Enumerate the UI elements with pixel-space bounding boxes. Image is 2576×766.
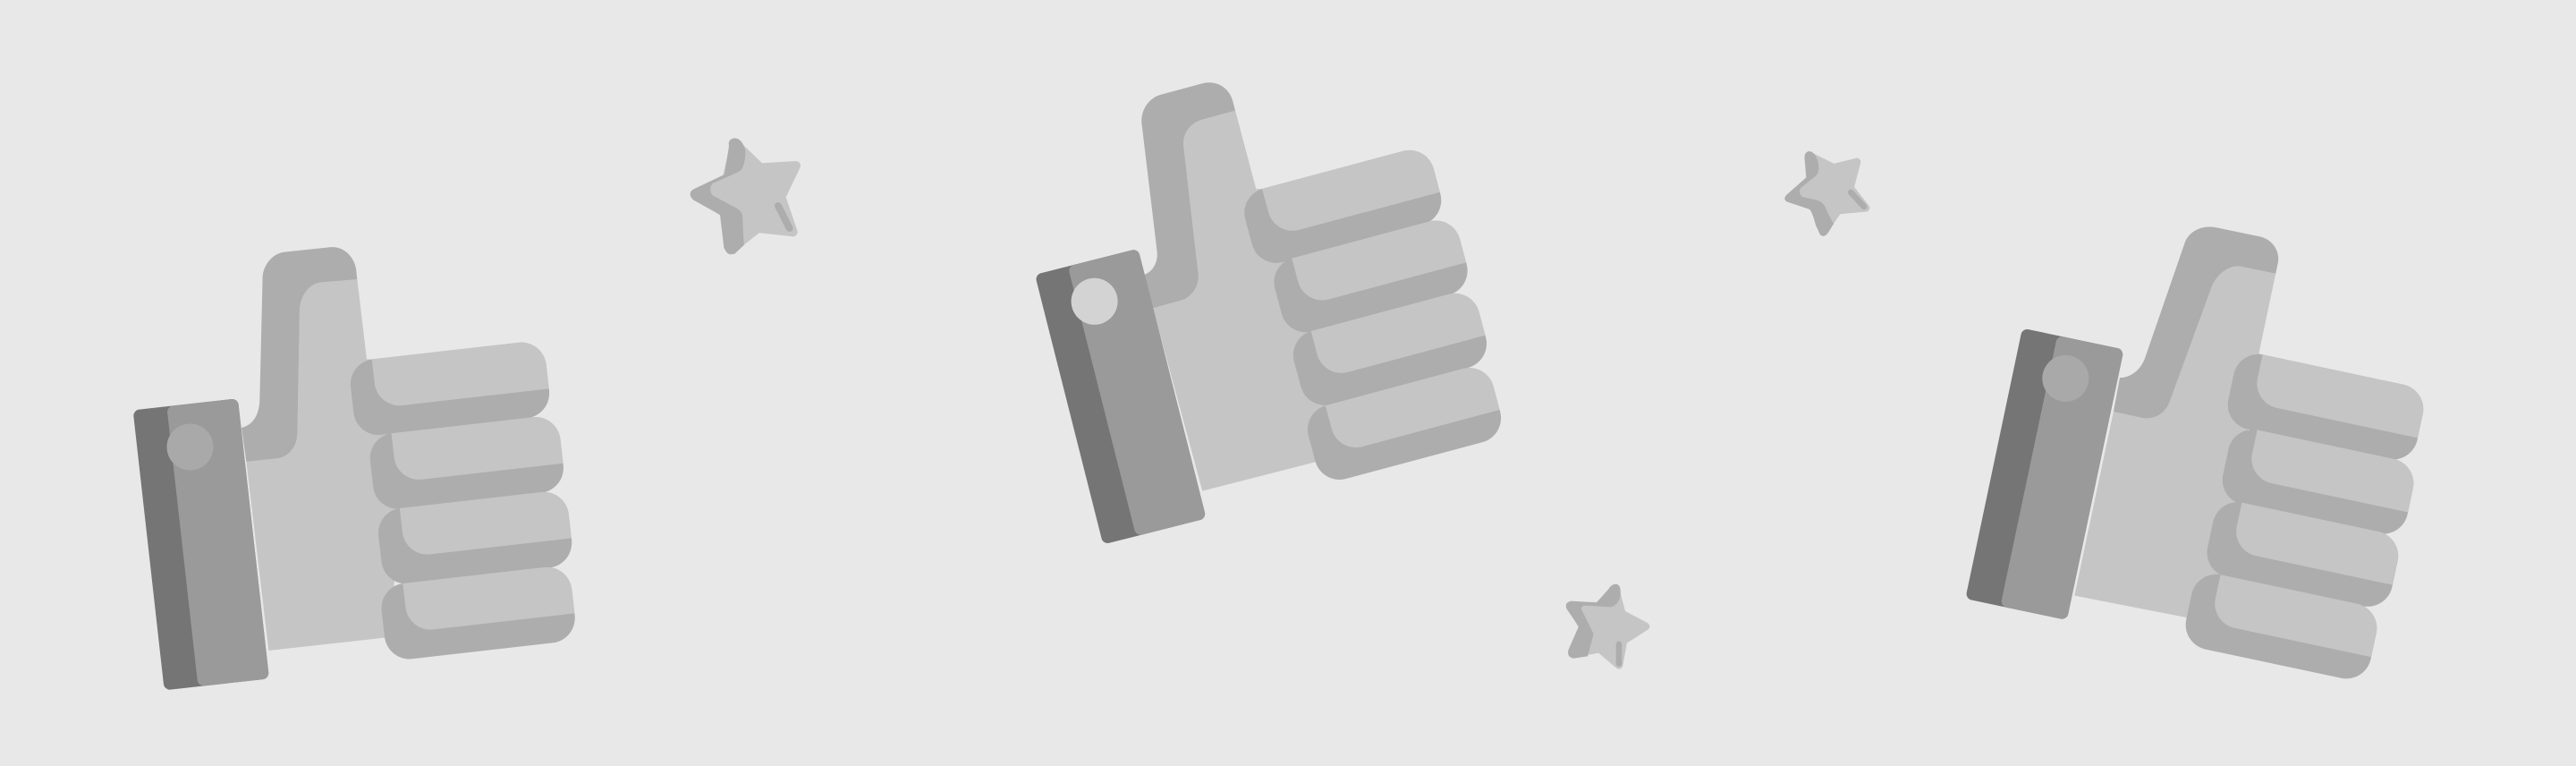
- cuff: [133, 398, 269, 690]
- cuff button: [1072, 278, 1118, 325]
- finger 1: [2224, 350, 2428, 464]
- finger 3: [376, 489, 574, 586]
- finger 2: [2218, 425, 2419, 539]
- finger 1: [348, 340, 552, 438]
- icon: star top left: [691, 138, 796, 254]
- finger 4: [2181, 570, 2381, 684]
- cuff button: [166, 424, 213, 471]
- hand palm and thumb: [2074, 226, 2278, 617]
- finger 3: [2202, 498, 2402, 611]
- cuff button: [2042, 355, 2089, 402]
- finger 3: [1288, 288, 1492, 411]
- icon: left thumbs up: [133, 247, 578, 690]
- finger 2: [1268, 215, 1473, 338]
- hand palm and thumb: [1141, 82, 1330, 491]
- finger 1: [1239, 145, 1447, 268]
- icon: star bottom centre: [1566, 584, 1646, 665]
- icon: centre thumbs up: [1035, 82, 1506, 544]
- icon: star top right: [1784, 151, 1866, 236]
- finger 2: [368, 414, 566, 512]
- cuff: [1035, 249, 1207, 544]
- icon: right thumbs up: [1965, 226, 2428, 684]
- finger 4: [379, 565, 578, 661]
- finger 4: [1302, 362, 1506, 485]
- hand palm and thumb: [242, 247, 396, 651]
- cuff: [1965, 328, 2124, 620]
